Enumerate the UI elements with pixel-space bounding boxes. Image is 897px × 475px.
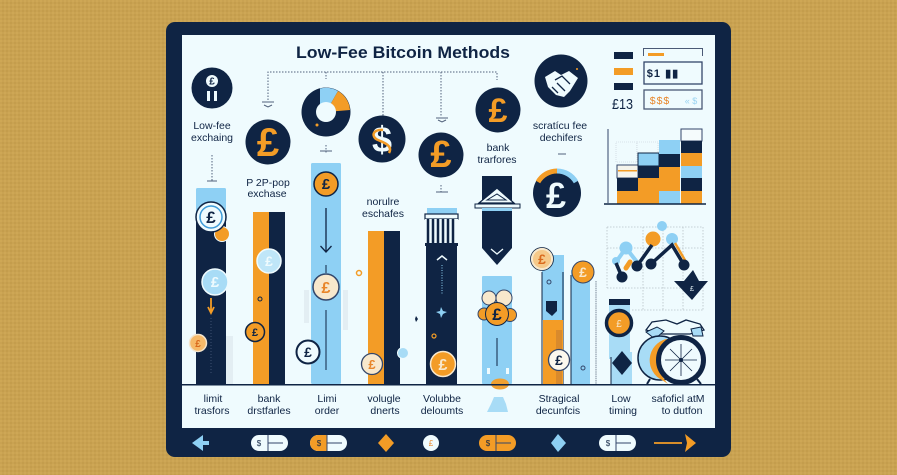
text: bank transfers: trarfores xyxy=(477,154,517,166)
text: volume exchanges: eschafes xyxy=(362,208,404,220)
bottom labels: trasfors xyxy=(194,405,230,417)
text: low-fee exchange: exchaing xyxy=(191,132,233,144)
bar 3: limit order: £ xyxy=(304,344,312,360)
bar 7: strategic deductions: £ xyxy=(579,264,587,280)
bottom labels: drstfarles xyxy=(247,405,291,417)
icon: pound gauge: £ xyxy=(546,175,566,216)
bottom labels: Limi xyxy=(317,393,337,405)
icon: pound circle 2: £ xyxy=(257,121,279,165)
icon: pound circle 4: £ xyxy=(489,92,508,130)
icon: dollar circle: $ xyxy=(372,119,392,160)
bottom labels: order xyxy=(315,405,340,417)
icon: down diamond arrow: £ xyxy=(690,286,694,293)
line chart xyxy=(607,221,703,310)
text: volume exchanges xyxy=(362,196,404,220)
text: strategic fee deductions: dechifers xyxy=(540,132,582,144)
bottom labels: limit xyxy=(204,393,222,405)
text: strategic fee deductions: scratícu fee xyxy=(533,120,587,132)
icon: pound circle 1: £ xyxy=(209,76,215,88)
bottom labels: safoficl atM xyxy=(651,393,705,405)
stacked bar chart xyxy=(604,129,706,204)
icon: dollar circle xyxy=(358,116,406,162)
text: low-fee exchange: Low-fee xyxy=(193,120,231,132)
text: P2P: exchase xyxy=(247,188,287,200)
bottom labels: volugle xyxy=(367,393,401,405)
bar 3: limit order: £ xyxy=(322,176,331,193)
bar 8: low timing: £ xyxy=(616,319,622,330)
text: bank transfers: bank xyxy=(487,142,510,154)
bar 5: volume discounts with columns icon xyxy=(415,208,458,384)
text: strategic fee deductions xyxy=(533,120,587,144)
bar 1: limit transfers xyxy=(190,188,230,384)
icon: donut chart xyxy=(302,88,350,136)
bar 2: bank drafts: £ xyxy=(265,253,273,269)
icon: pound circle 2 xyxy=(246,120,290,165)
bottom labels: to dutfon xyxy=(662,405,703,417)
bar 1: limit transfers: £ xyxy=(206,208,216,227)
bottom nav strip: $ xyxy=(486,439,491,448)
icon: pound circle 1 xyxy=(192,68,232,108)
bar 7: strategic deductions xyxy=(530,248,596,384)
bar 7: strategic deductions: £ xyxy=(555,352,563,368)
bottom labels: decunfcis xyxy=(536,405,580,417)
legend: $1 ▮▮ xyxy=(647,68,679,80)
legend: £13 xyxy=(612,96,633,113)
bottom labels: timing xyxy=(609,405,637,417)
bottom nav strip: £ xyxy=(429,439,434,448)
bar 4: volume discounts xyxy=(356,231,408,384)
bottom nav strip: $ xyxy=(317,439,322,448)
icon: pound gauge xyxy=(533,169,581,217)
frame xyxy=(166,22,731,457)
text: P2P: P 2P-pop xyxy=(246,177,290,189)
bar 3: limit order: £ xyxy=(322,280,331,297)
legend: « $ xyxy=(685,96,697,106)
bottom labels: deloumts xyxy=(421,405,463,417)
icon: down diamond arrow xyxy=(674,270,708,300)
bar 1: limit transfers: £ xyxy=(211,274,220,291)
bar 2: bank drafts xyxy=(226,212,285,384)
icon: alarm clock xyxy=(638,320,704,384)
bar 6: bank pentagon and light bar: £ xyxy=(492,305,502,324)
bottom labels: dnerts xyxy=(370,405,400,417)
bottom labels: Volubbe xyxy=(423,393,461,405)
bar 4: volume discounts: £ xyxy=(368,357,376,372)
legend xyxy=(612,48,702,113)
bar 1: limit transfers: £ xyxy=(195,339,201,350)
bottom nav strip: $ xyxy=(257,439,262,448)
title: Low-Fee Bitcoin Methods xyxy=(296,43,510,62)
bottom nav strip: $ xyxy=(606,439,611,448)
bottom labels xyxy=(194,393,705,417)
bar 6: bank pentagon and light bar xyxy=(475,176,520,390)
icon: pound circle 3: £ xyxy=(430,134,452,176)
baseline xyxy=(182,384,715,386)
bar 2: bank drafts: £ xyxy=(252,327,258,339)
text: volume exchanges: norulre xyxy=(367,196,400,208)
bottom labels: Stragical xyxy=(539,393,579,405)
connector lines xyxy=(207,72,566,193)
bar 8: low timing xyxy=(606,299,632,384)
bar 3: limit order xyxy=(296,163,348,384)
icon: pound circle 3 xyxy=(418,132,464,178)
bottom nav strip xyxy=(192,434,696,452)
legend: $$$ xyxy=(650,95,670,107)
text: bank transfers xyxy=(477,142,517,166)
bar 7: strategic deductions: £ xyxy=(538,251,546,267)
text: low-fee exchange xyxy=(191,120,233,144)
bottom labels: bank xyxy=(258,393,281,405)
bar 5: volume discounts with columns icon: £ xyxy=(439,357,448,374)
icon: handshake xyxy=(534,54,588,108)
icon: pound circle 4 xyxy=(476,88,520,132)
text: P2P xyxy=(246,177,290,200)
bottom labels: Low xyxy=(611,393,631,405)
